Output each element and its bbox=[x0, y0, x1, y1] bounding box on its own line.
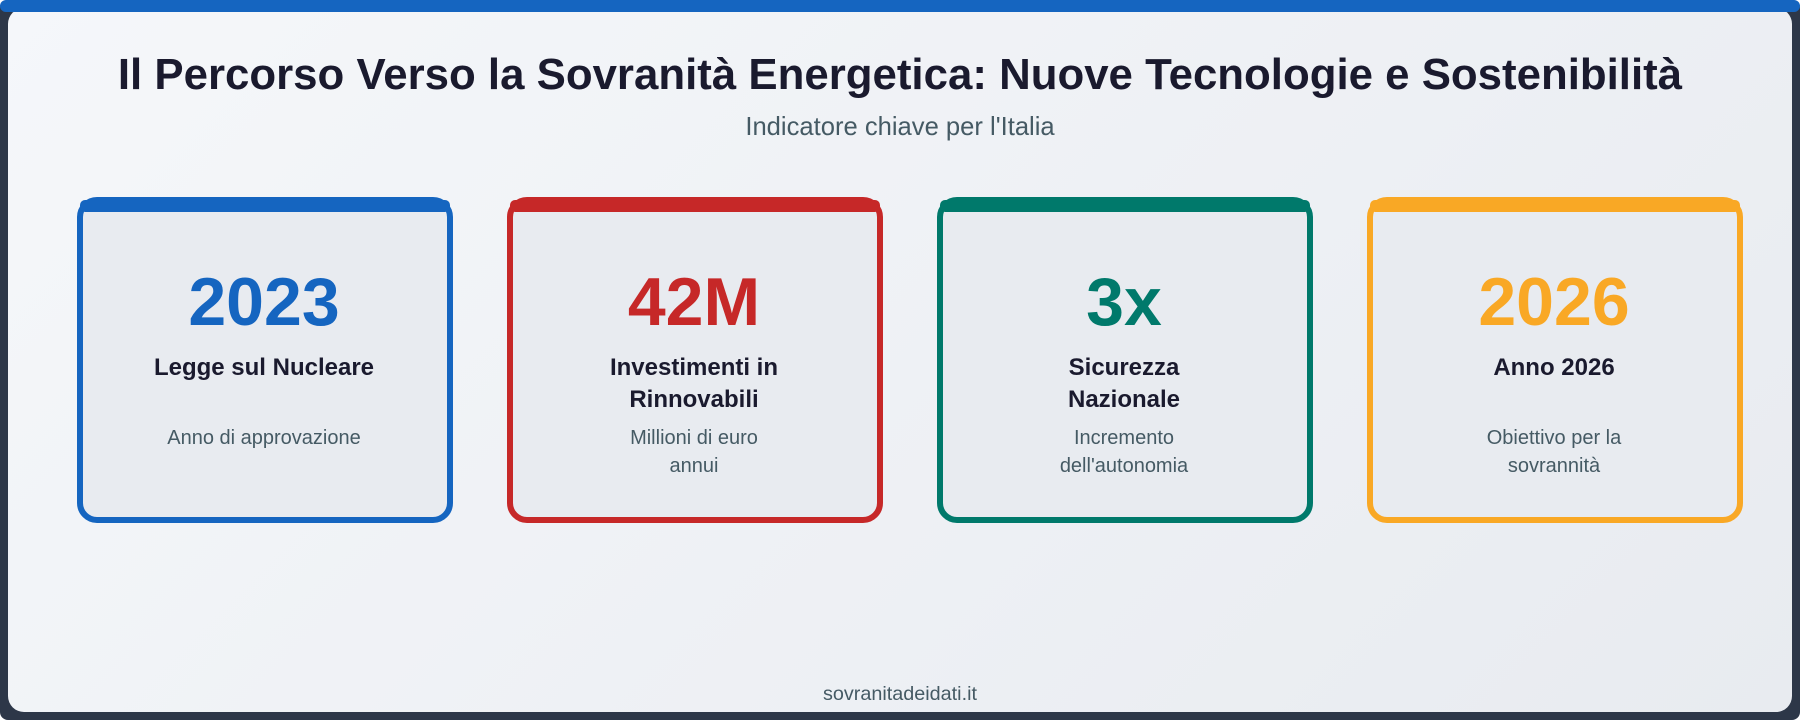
card accent bar bbox=[80, 200, 450, 212]
panel: Investimenti in Rinnovabili bbox=[507, 197, 883, 523]
footer source: sovranitadeidati.it bbox=[823, 683, 977, 705]
title: Il Percorso Verso la Sovranità Energetica: Nuove Tecnologie e Sostenibilità bbox=[118, 50, 1682, 99]
card description bbox=[1487, 427, 1622, 477]
card description bbox=[1060, 427, 1188, 477]
top accent bar bbox=[0, 0, 1800, 12]
stat value: 3x bbox=[1086, 264, 1162, 340]
card description: Millioni di euro bbox=[630, 427, 758, 449]
card heading: Anno 2026 bbox=[1493, 354, 1615, 381]
card description: Anno di approvazione bbox=[167, 427, 361, 449]
card accent bar bbox=[1370, 200, 1740, 212]
stat value: 42M bbox=[628, 264, 760, 340]
card description: dell'autonomia bbox=[1060, 455, 1188, 477]
card heading: Rinnovabili bbox=[629, 386, 759, 413]
card description: annui bbox=[670, 455, 718, 477]
panel: Legge sul Nucleare bbox=[77, 197, 453, 523]
card heading: Sicurezza bbox=[1069, 354, 1179, 381]
card accent bar bbox=[510, 200, 880, 212]
card description: Incremento bbox=[1074, 427, 1174, 449]
panel: Sicurezza Nazionale bbox=[937, 197, 1313, 523]
card description bbox=[630, 427, 758, 477]
card heading bbox=[1068, 354, 1180, 413]
card heading: Investimenti in bbox=[610, 354, 778, 381]
card heading bbox=[610, 354, 778, 413]
stat value: 2023 bbox=[188, 264, 340, 340]
subtitle: Indicatore chiave per l'Italia bbox=[745, 113, 1055, 141]
panel: Anno 2026 bbox=[1367, 197, 1743, 523]
card heading: Legge sul Nucleare bbox=[154, 354, 374, 381]
stat value: 2026 bbox=[1478, 264, 1630, 340]
card description: Obiettivo per la bbox=[1487, 427, 1621, 449]
card description: sovrannità bbox=[1508, 455, 1600, 477]
card accent bar bbox=[940, 200, 1310, 212]
card heading: Nazionale bbox=[1068, 386, 1180, 413]
